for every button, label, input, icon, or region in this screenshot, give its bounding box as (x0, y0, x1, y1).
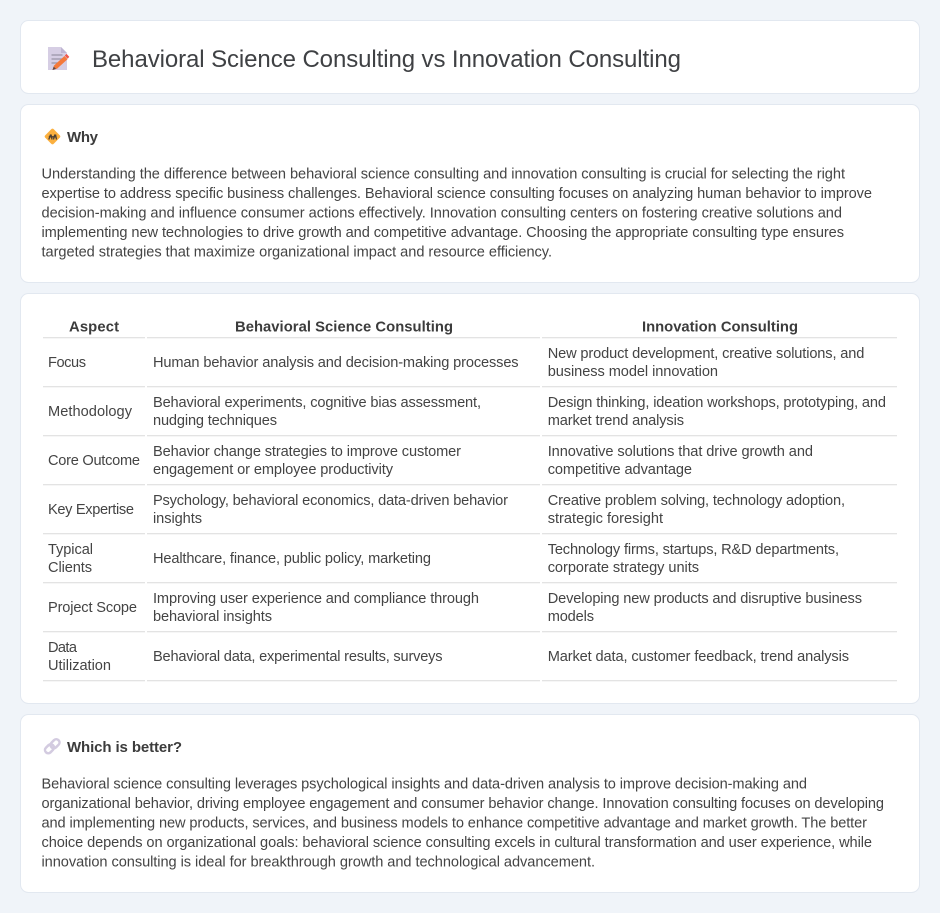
text block: verdict: Behavioral science consulting leverages psychological insights and data-driven analysis to improve decision-making and (42, 776, 807, 792)
table row: key expertise: strategic foresight (548, 511, 663, 527)
table row: project scope: Improving user experience and compliance through (153, 591, 479, 607)
text block: why explanation: decision-making and influence consumer actions effectively. Innovation consulting centers on fostering creative solutions and (42, 206, 842, 222)
panel: which is better (20, 714, 920, 892)
table row: data utilization: Behavioral data, experimental results, surveys (153, 649, 442, 665)
panel: title header (20, 20, 920, 94)
table row: methodology (43, 395, 897, 436)
heading: why: Why (67, 129, 99, 146)
table row: methodology: market trend analysis (548, 413, 684, 429)
table header row: Innovation Consulting (642, 320, 798, 336)
table row: typical clients: Technology firms, startups, R&D departments, (548, 542, 839, 558)
text block: verdict: choice depends on organizational goals: behavioral science consulting excels in cultural transformation and user experience, while (42, 835, 872, 851)
panel: why (20, 104, 920, 282)
text block: verdict: organizational behavior, driving employee engagement and consumer behavior change. Innovation consulting focuses on developing (42, 796, 884, 812)
table header row: Aspect (69, 320, 119, 336)
icon: chain link (44, 738, 61, 755)
table row: focus: Focus (48, 355, 86, 371)
text block: why explanation: expertise to address specific business challenges. Behavioral science consulting focuses on analyzing human behavior to improve (42, 186, 872, 202)
table row: methodology: Methodology (48, 404, 133, 420)
text block: why explanation: implementing new technologies to drive growth and competitive advantage. Choosing the appropriate consulting type ensures (42, 225, 844, 241)
table header row: Behavioral Science Consulting (235, 320, 453, 336)
text block: verdict (42, 776, 884, 870)
table header row (43, 320, 897, 338)
table row: project scope (43, 591, 897, 632)
table row: data utilization: Utilization (48, 658, 111, 674)
table row: project scope: Developing new products and disruptive business (548, 591, 862, 607)
panel: comparison table (20, 294, 920, 704)
table row: key expertise: Psychology, behavioral economics, data-driven behavior (153, 493, 508, 509)
table row: typical clients: Typical (48, 542, 93, 558)
table row: core outcome: Behavior change strategies to improve customer (153, 444, 461, 460)
table row: data utilization: Market data, customer feedback, trend analysis (548, 649, 849, 665)
table row: core outcome: engagement or employee productivity (153, 462, 394, 478)
text block: why explanation (42, 166, 872, 260)
icon: orange diamond sign (44, 128, 61, 145)
table row: typical clients (43, 542, 897, 583)
table row: typical clients: Clients (48, 560, 92, 576)
icon: document with pencil (48, 47, 69, 70)
table row: focus: business model innovation (548, 364, 718, 380)
table row: key expertise: Key Expertise (48, 502, 134, 518)
table row: focus: Human behavior analysis and decision-making processes (153, 355, 519, 371)
table row: typical clients: Healthcare, finance, public policy, marketing (153, 551, 431, 567)
table row: methodology: Behavioral experiments, cognitive bias assessment, (153, 395, 481, 411)
table row: focus: New product development, creative solutions, and (548, 346, 864, 362)
table row: typical clients: corporate strategy units (548, 560, 699, 576)
table row: project scope: Project Scope (48, 600, 137, 616)
table row: focus (43, 346, 897, 387)
text block: why explanation: Understanding the difference between behavioral science consulting and innovation consulting is crucial for selecting the right (42, 166, 845, 182)
table row: core outcome: Core Outcome (48, 453, 140, 469)
table row: project scope: models (548, 609, 594, 625)
table row: key expertise (43, 493, 897, 534)
table row: data utilization: Data (48, 640, 78, 656)
table row: methodology: nudging techniques (153, 413, 277, 429)
text block: verdict: innovation consulting is ideal for breakthrough growth and technological advancement. (42, 854, 595, 870)
table row: key expertise: Creative problem solving, technology adoption, (548, 493, 845, 509)
table row: key expertise: insights (153, 511, 202, 527)
table row: core outcome (43, 444, 897, 485)
table row: project scope: behavioral insights (153, 609, 272, 625)
text block: verdict: and implementing new products, services, and business models to enhance competitive advantage and market growth. The better (42, 816, 867, 832)
table row: methodology: Design thinking, ideation workshops, prototyping, and (548, 395, 886, 411)
table row: data utilization (43, 640, 897, 681)
title: Behavioral Science Consulting vs Innovation Consulting (92, 46, 681, 73)
table row: core outcome: competitive advantage (548, 462, 692, 478)
heading: which is better: Which is better? (67, 739, 182, 756)
text block: why explanation: targeted strategies that maximize organizational impact and resource efficiency. (42, 244, 552, 260)
table row: core outcome: Innovative solutions that drive growth and (548, 444, 813, 460)
